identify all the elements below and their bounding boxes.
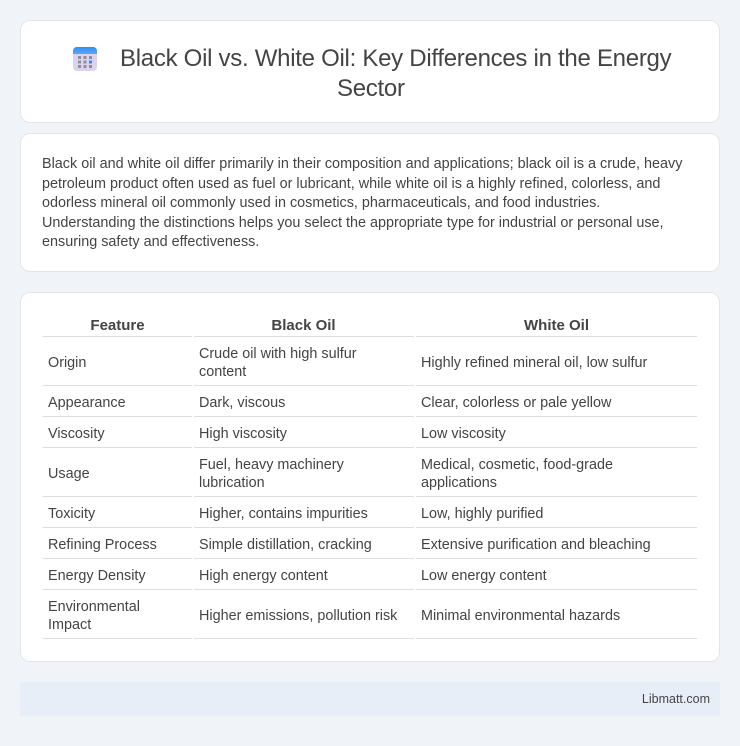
row: toxicity: Higher, contains impurities bbox=[199, 506, 368, 522]
intro paragraph: Understanding the distinctions helps you select the appropriate type for industrial or personal use, bbox=[42, 215, 664, 231]
row: refining process: Extensive purification and bleaching bbox=[421, 537, 651, 553]
intro paragraph: petroleum product often used as fuel or lubricant, while white oil is a highly refined, colorless, and bbox=[42, 176, 660, 192]
title bbox=[120, 45, 672, 102]
row: environmental impact: Minimal environmental hazards bbox=[421, 608, 620, 624]
row: usage: lubrication bbox=[199, 475, 265, 491]
row: origin: Origin bbox=[48, 355, 86, 371]
row: refining process: Refining Process bbox=[48, 537, 157, 553]
row: appearance: Clear, colorless or pale yellow bbox=[421, 395, 611, 411]
title: Black Oil vs. White Oil: Key Differences in the Energy bbox=[120, 45, 671, 72]
footer credit: Libmatt.com bbox=[642, 692, 710, 706]
column headers: Feature bbox=[90, 317, 145, 334]
comparison table panel bbox=[20, 292, 720, 662]
row: origin: Highly refined mineral oil, low sulfur bbox=[421, 355, 647, 371]
footer bar bbox=[20, 682, 720, 716]
title: Sector bbox=[337, 74, 405, 102]
intro paragraph: ensuring safety and effectiveness. bbox=[42, 234, 259, 250]
row: viscosity: High viscosity bbox=[199, 426, 287, 442]
row: environmental impact: Higher emissions, pollution risk bbox=[199, 608, 397, 624]
intro paragraph: Black oil and white oil differ primarily in their composition and applications; black oil is a crude, heavy bbox=[42, 156, 682, 172]
header card bbox=[20, 20, 720, 123]
row: origin bbox=[48, 346, 648, 380]
row: usage: Fuel, heavy machinery bbox=[199, 457, 344, 473]
intro paragraph bbox=[42, 156, 682, 250]
column headers: Black Oil bbox=[271, 317, 336, 334]
row: usage: Medical, cosmetic, food-grade bbox=[421, 457, 613, 473]
row: usage: Usage bbox=[48, 466, 90, 482]
row: environmental impact: Environmental bbox=[48, 599, 140, 615]
row: usage bbox=[48, 457, 613, 491]
row: viscosity: Low viscosity bbox=[421, 426, 506, 442]
row: origin: Crude oil with high sulfur bbox=[199, 346, 357, 362]
row: energy density: Low energy content bbox=[421, 568, 547, 584]
intro paragraph: odorless mineral oil commonly used in cosmetics, pharmaceuticals, and food industries. bbox=[42, 195, 600, 211]
row: energy density: High energy content bbox=[199, 568, 328, 584]
row: usage: applications bbox=[421, 475, 497, 491]
row: toxicity: Toxicity bbox=[48, 506, 95, 522]
row: appearance bbox=[48, 395, 612, 411]
column headers: White Oil bbox=[524, 317, 589, 334]
row: viscosity: Viscosity bbox=[48, 426, 105, 442]
row: toxicity: Low, highly purified bbox=[421, 506, 543, 522]
row: energy density bbox=[48, 568, 547, 584]
row lines bbox=[43, 336, 697, 639]
row: refining process bbox=[48, 537, 651, 553]
row: environmental impact: Impact bbox=[48, 617, 91, 633]
intro text panel bbox=[20, 133, 720, 272]
row: refining process: Simple distillation, cracking bbox=[199, 537, 372, 553]
row: environmental impact bbox=[48, 599, 620, 633]
row: origin: content bbox=[199, 364, 246, 380]
row: appearance: Dark, viscous bbox=[199, 395, 285, 411]
row: energy density: Energy Density bbox=[48, 568, 146, 584]
row: toxicity bbox=[48, 506, 543, 522]
column headers bbox=[90, 317, 589, 334]
icon: calendar bbox=[73, 47, 97, 71]
row: appearance: Appearance bbox=[48, 395, 126, 411]
row: viscosity bbox=[48, 426, 506, 442]
